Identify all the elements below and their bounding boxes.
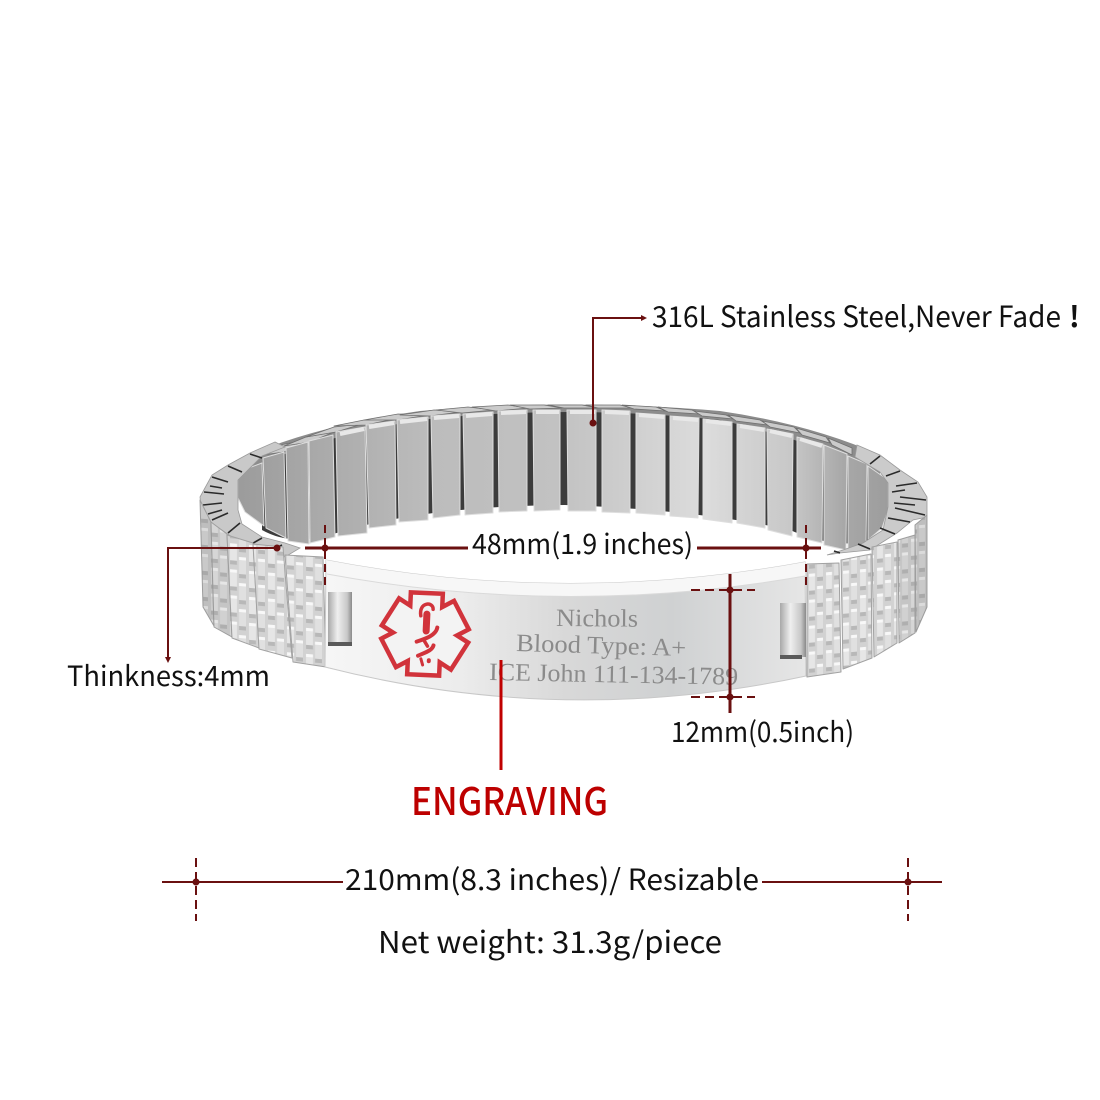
- engraved text: [489, 605, 738, 691]
- callout: material: !: [1069, 294, 1080, 336]
- engraved text: ICE John 111-134-1789: [489, 659, 738, 691]
- dimension: total length 210mm: 210mm(8.3 inches)/ Resizable: [345, 857, 759, 899]
- net weight: Net weight: 31.3g/piece: [378, 918, 722, 962]
- callout: thickness: [67, 544, 280, 695]
- callout: thickness: Thinkness:4mm: [67, 655, 270, 695]
- icon: star of life medical symbol: [380, 591, 470, 677]
- left corner rim: [200, 442, 300, 557]
- right hinge slot: [780, 603, 806, 659]
- dimension: total length 210mm: [162, 857, 942, 921]
- ID plate: [325, 560, 806, 700]
- dimension: plate length 48mm: 48mm(1.9 inches): [472, 523, 693, 563]
- right textured links: [807, 515, 927, 677]
- left hinge slot: [328, 592, 352, 646]
- engraved text: Nichols: [556, 605, 638, 633]
- dimension: plate width 12mm: [671, 574, 854, 751]
- callout: engraving: ENGRAVING: [411, 771, 608, 826]
- dimension: plate length 48mm: [305, 523, 821, 590]
- engraved text: Blood Type: A+: [516, 630, 687, 662]
- back inner band of plain links: [228, 404, 888, 550]
- callout: material: 316L Stainless Steel,Never Fade: [652, 294, 1061, 336]
- right corner rim: [827, 445, 927, 555]
- dimension: plate width 12mm: 12mm(0.5inch): [671, 711, 854, 751]
- callout: material: [590, 294, 1080, 426]
- bracelet: [200, 404, 927, 700]
- left textured links: [200, 500, 326, 667]
